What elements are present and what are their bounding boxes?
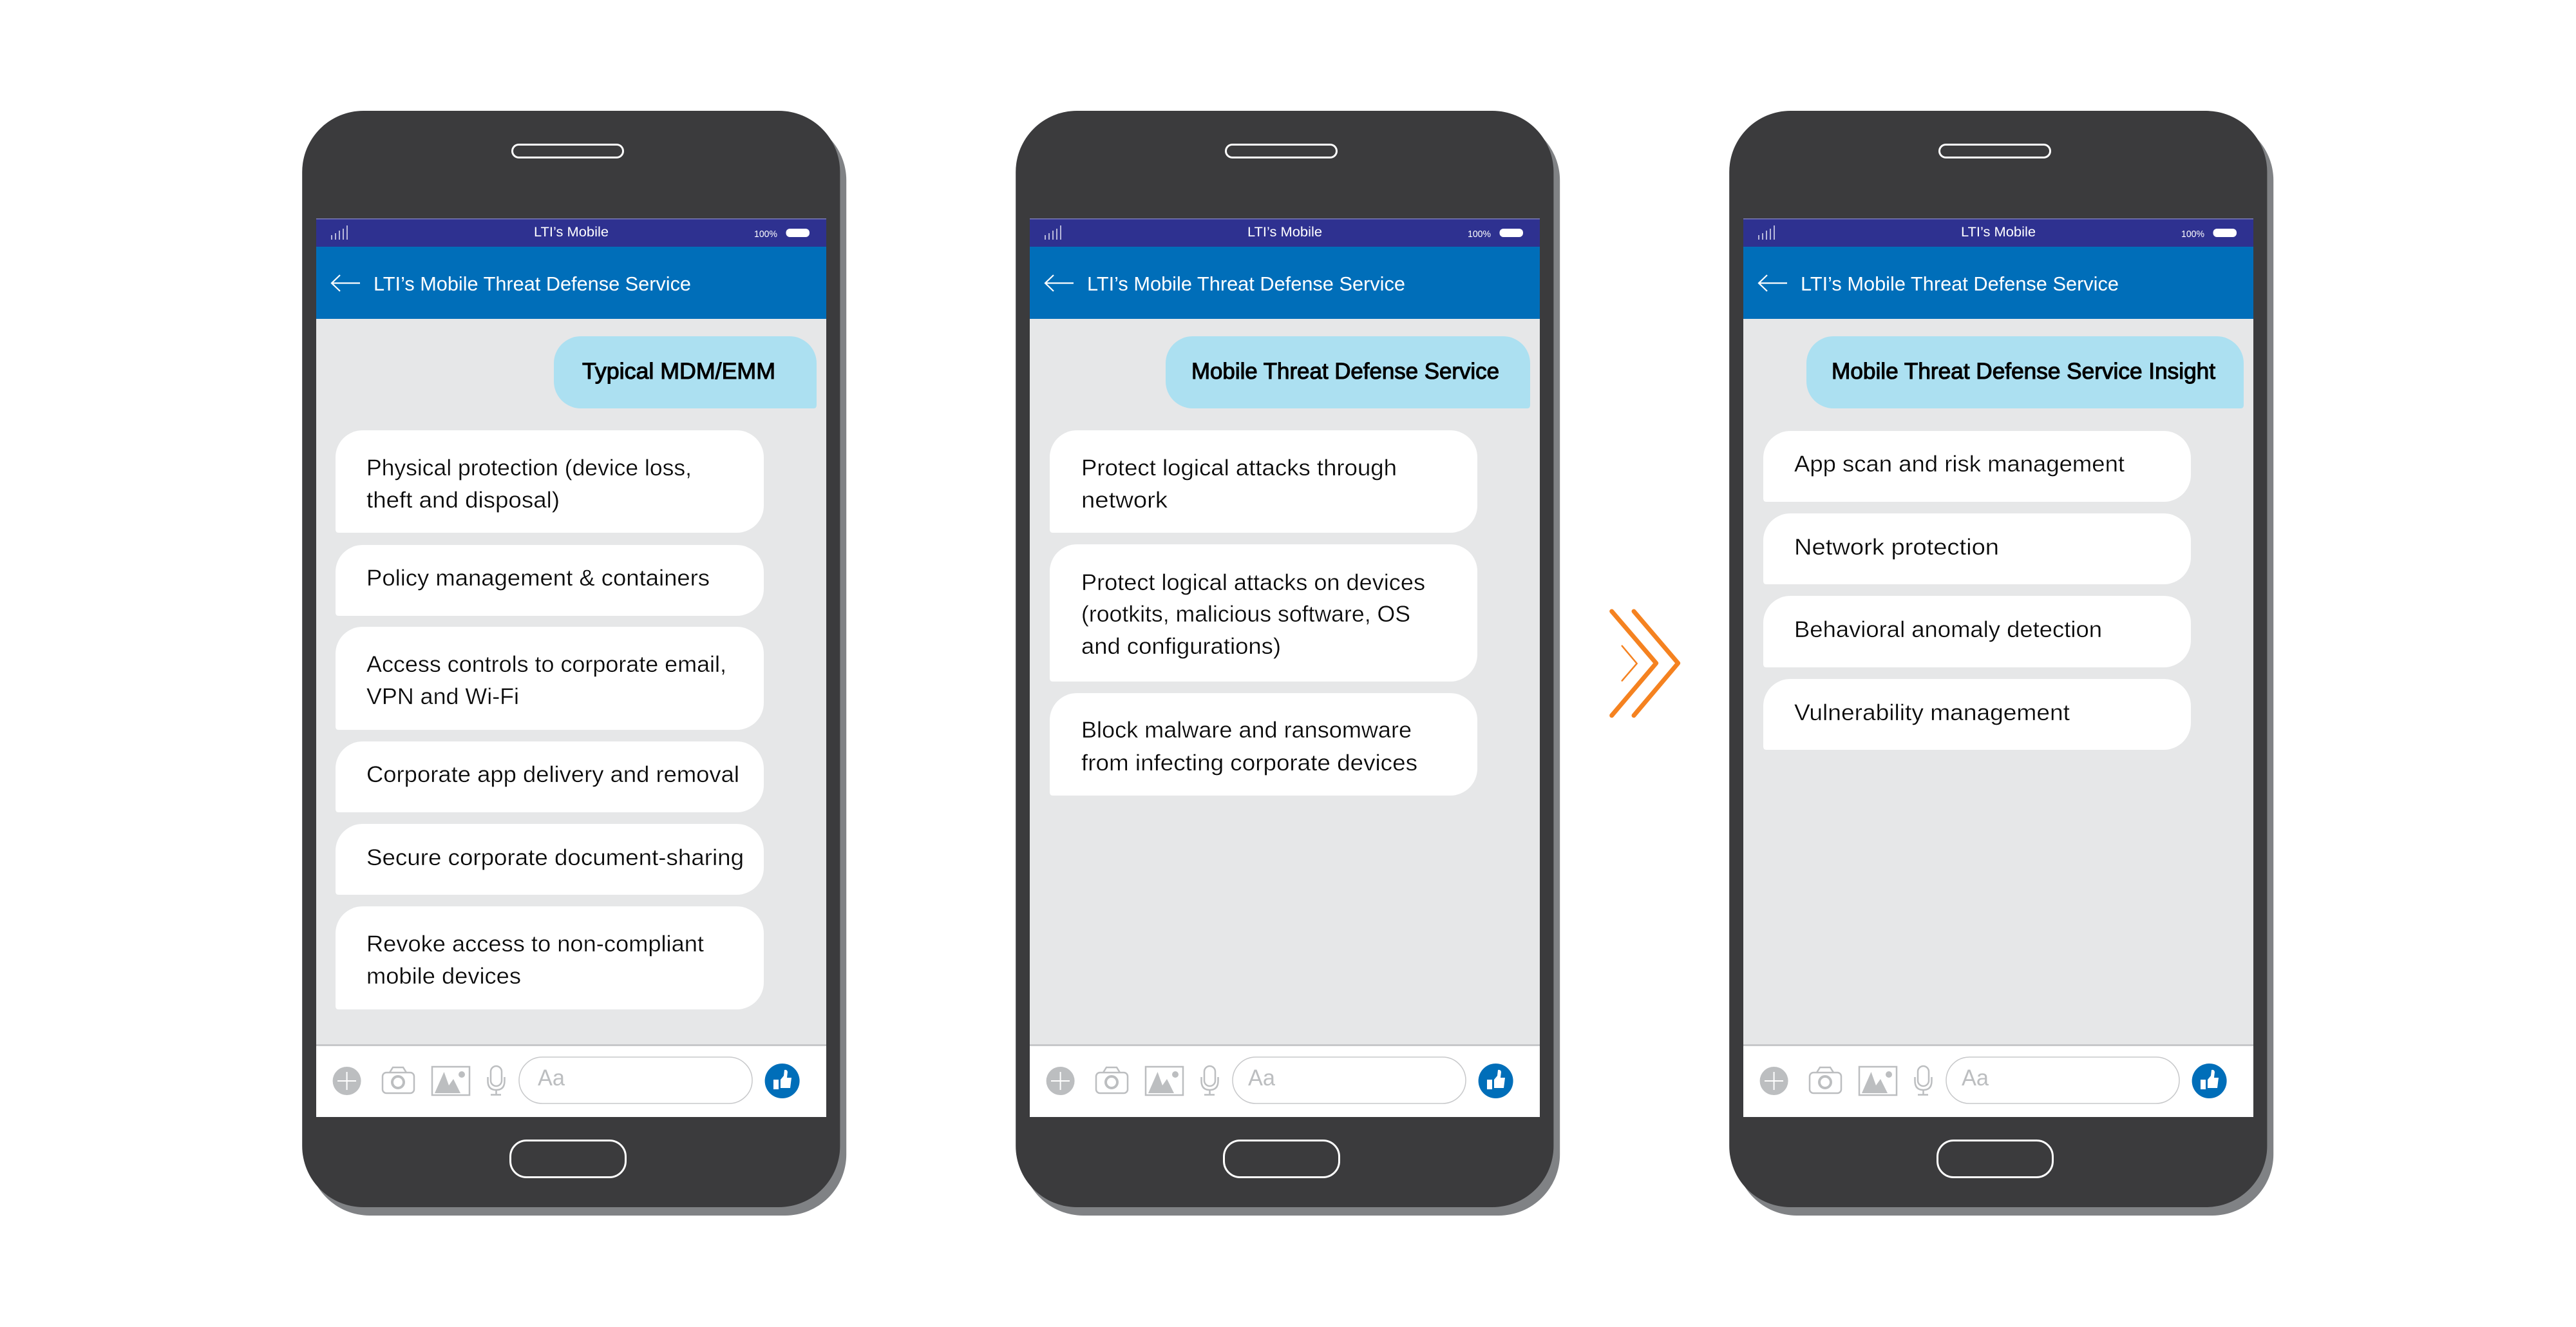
bubble: physical protection: theft and disposal) [366,488,560,513]
phone chrome and screen frame [1016,111,1560,1216]
bubble: network attacks: Protect logical attacks through [1081,455,1397,481]
bubble: access controls: VPN and Wi-Fi [366,684,519,709]
bubble: device attacks: Protect logical attacks on devices [1081,570,1425,595]
phone chrome and screen frame [302,111,846,1216]
bubble: revoke access [336,906,764,1009]
app header [1030,247,1540,319]
status bar [316,218,826,247]
phone: Typical MDM/EMM [302,111,846,1216]
status bar: LTI’s Mobile [1961,225,2036,240]
phone chrome and screen frame [1729,111,2273,1216]
status bar: 100% [2181,229,2204,240]
bubble: physical protection: Physical protection (device loss, [366,455,692,481]
bubble: document sharing [336,824,764,895]
status bar: LTI’s Mobile [1247,225,1322,240]
heading bubble: Mobile Threat Defense Service Insight [1806,336,2244,408]
app header: LTI’s Mobile Threat Defense Service [1087,272,1405,295]
bubble: network protection [1763,513,2191,584]
heading bubble: Typical MDM/EMM [554,336,817,408]
status bar: 100% [754,229,777,240]
app header [1743,247,2253,319]
status bar: 100% [1468,229,1491,240]
bubble: app delivery [336,741,764,812]
bubble: block malware: Block malware and ransomware [1081,718,1412,743]
bubble: vulnerability management: Vulnerability management [1794,700,2070,725]
bubble: revoke access: mobile devices [366,964,521,989]
bubble: behavioral anomaly [1763,596,2191,667]
bubble: device attacks [1050,544,1477,682]
bubble: access controls [336,627,764,730]
message toolbar [1030,1044,1540,1117]
bubble: physical protection [336,430,764,533]
bubble: network protection: Network protection [1794,535,1999,560]
bubble: revoke access: Revoke access to non-compliant [366,931,704,957]
bubble: device attacks: and configurations) [1081,634,1281,659]
bubble: app scan [1763,431,2191,502]
bubble: app delivery: Corporate app delivery and removal [366,762,739,787]
app header: LTI’s Mobile Threat Defense Service [1801,272,2119,295]
bubble: block malware [1050,693,1477,796]
bubble: document sharing: Secure corporate document-sharing [366,845,744,870]
phone: Mobile Threat Defense Service [1016,111,1560,1216]
bubble: behavioral anomaly: Behavioral anomaly detection [1794,617,2102,642]
status bar [1743,218,2253,247]
message toolbar: Aa [1248,1065,1276,1091]
bubble: app scan: App scan and risk management [1794,452,2125,477]
heading bubble: Typical MDM/EMM: Typical MDM/EMM [582,359,775,384]
bubble: policy management: Policy management & containers [366,566,710,591]
heading bubble: Mobile Threat Defense Service Insight: Mobile Threat Defense Service Insight [1832,359,2215,384]
bubble: vulnerability management [1763,679,2191,750]
status bar: LTI’s Mobile [534,225,609,240]
bubble: access controls: Access controls to corporate email, [366,652,726,677]
app header: LTI’s Mobile Threat Defense Service [374,272,691,295]
bubble: policy management [336,545,764,616]
app header [316,247,826,319]
message toolbar: Aa [538,1065,565,1091]
phone: Mobile Threat Defense Service Insight [1729,111,2273,1216]
message toolbar [1743,1044,2253,1117]
bubble: device attacks: (rootkits, malicious software, OS [1081,602,1410,627]
status bar [1030,218,1540,247]
bubble: network attacks [1050,430,1477,533]
message toolbar: Aa [1962,1065,1989,1091]
bubble: block malware: from infecting corporate devices [1081,750,1417,776]
heading bubble: Mobile Threat Defense Service: Mobile Threat Defense Service [1191,359,1499,384]
message toolbar [316,1044,826,1117]
heading bubble: Mobile Threat Defense Service [1166,336,1530,408]
arrow: orange chevrons [1612,611,1678,716]
bubble: network attacks: network [1081,488,1168,513]
